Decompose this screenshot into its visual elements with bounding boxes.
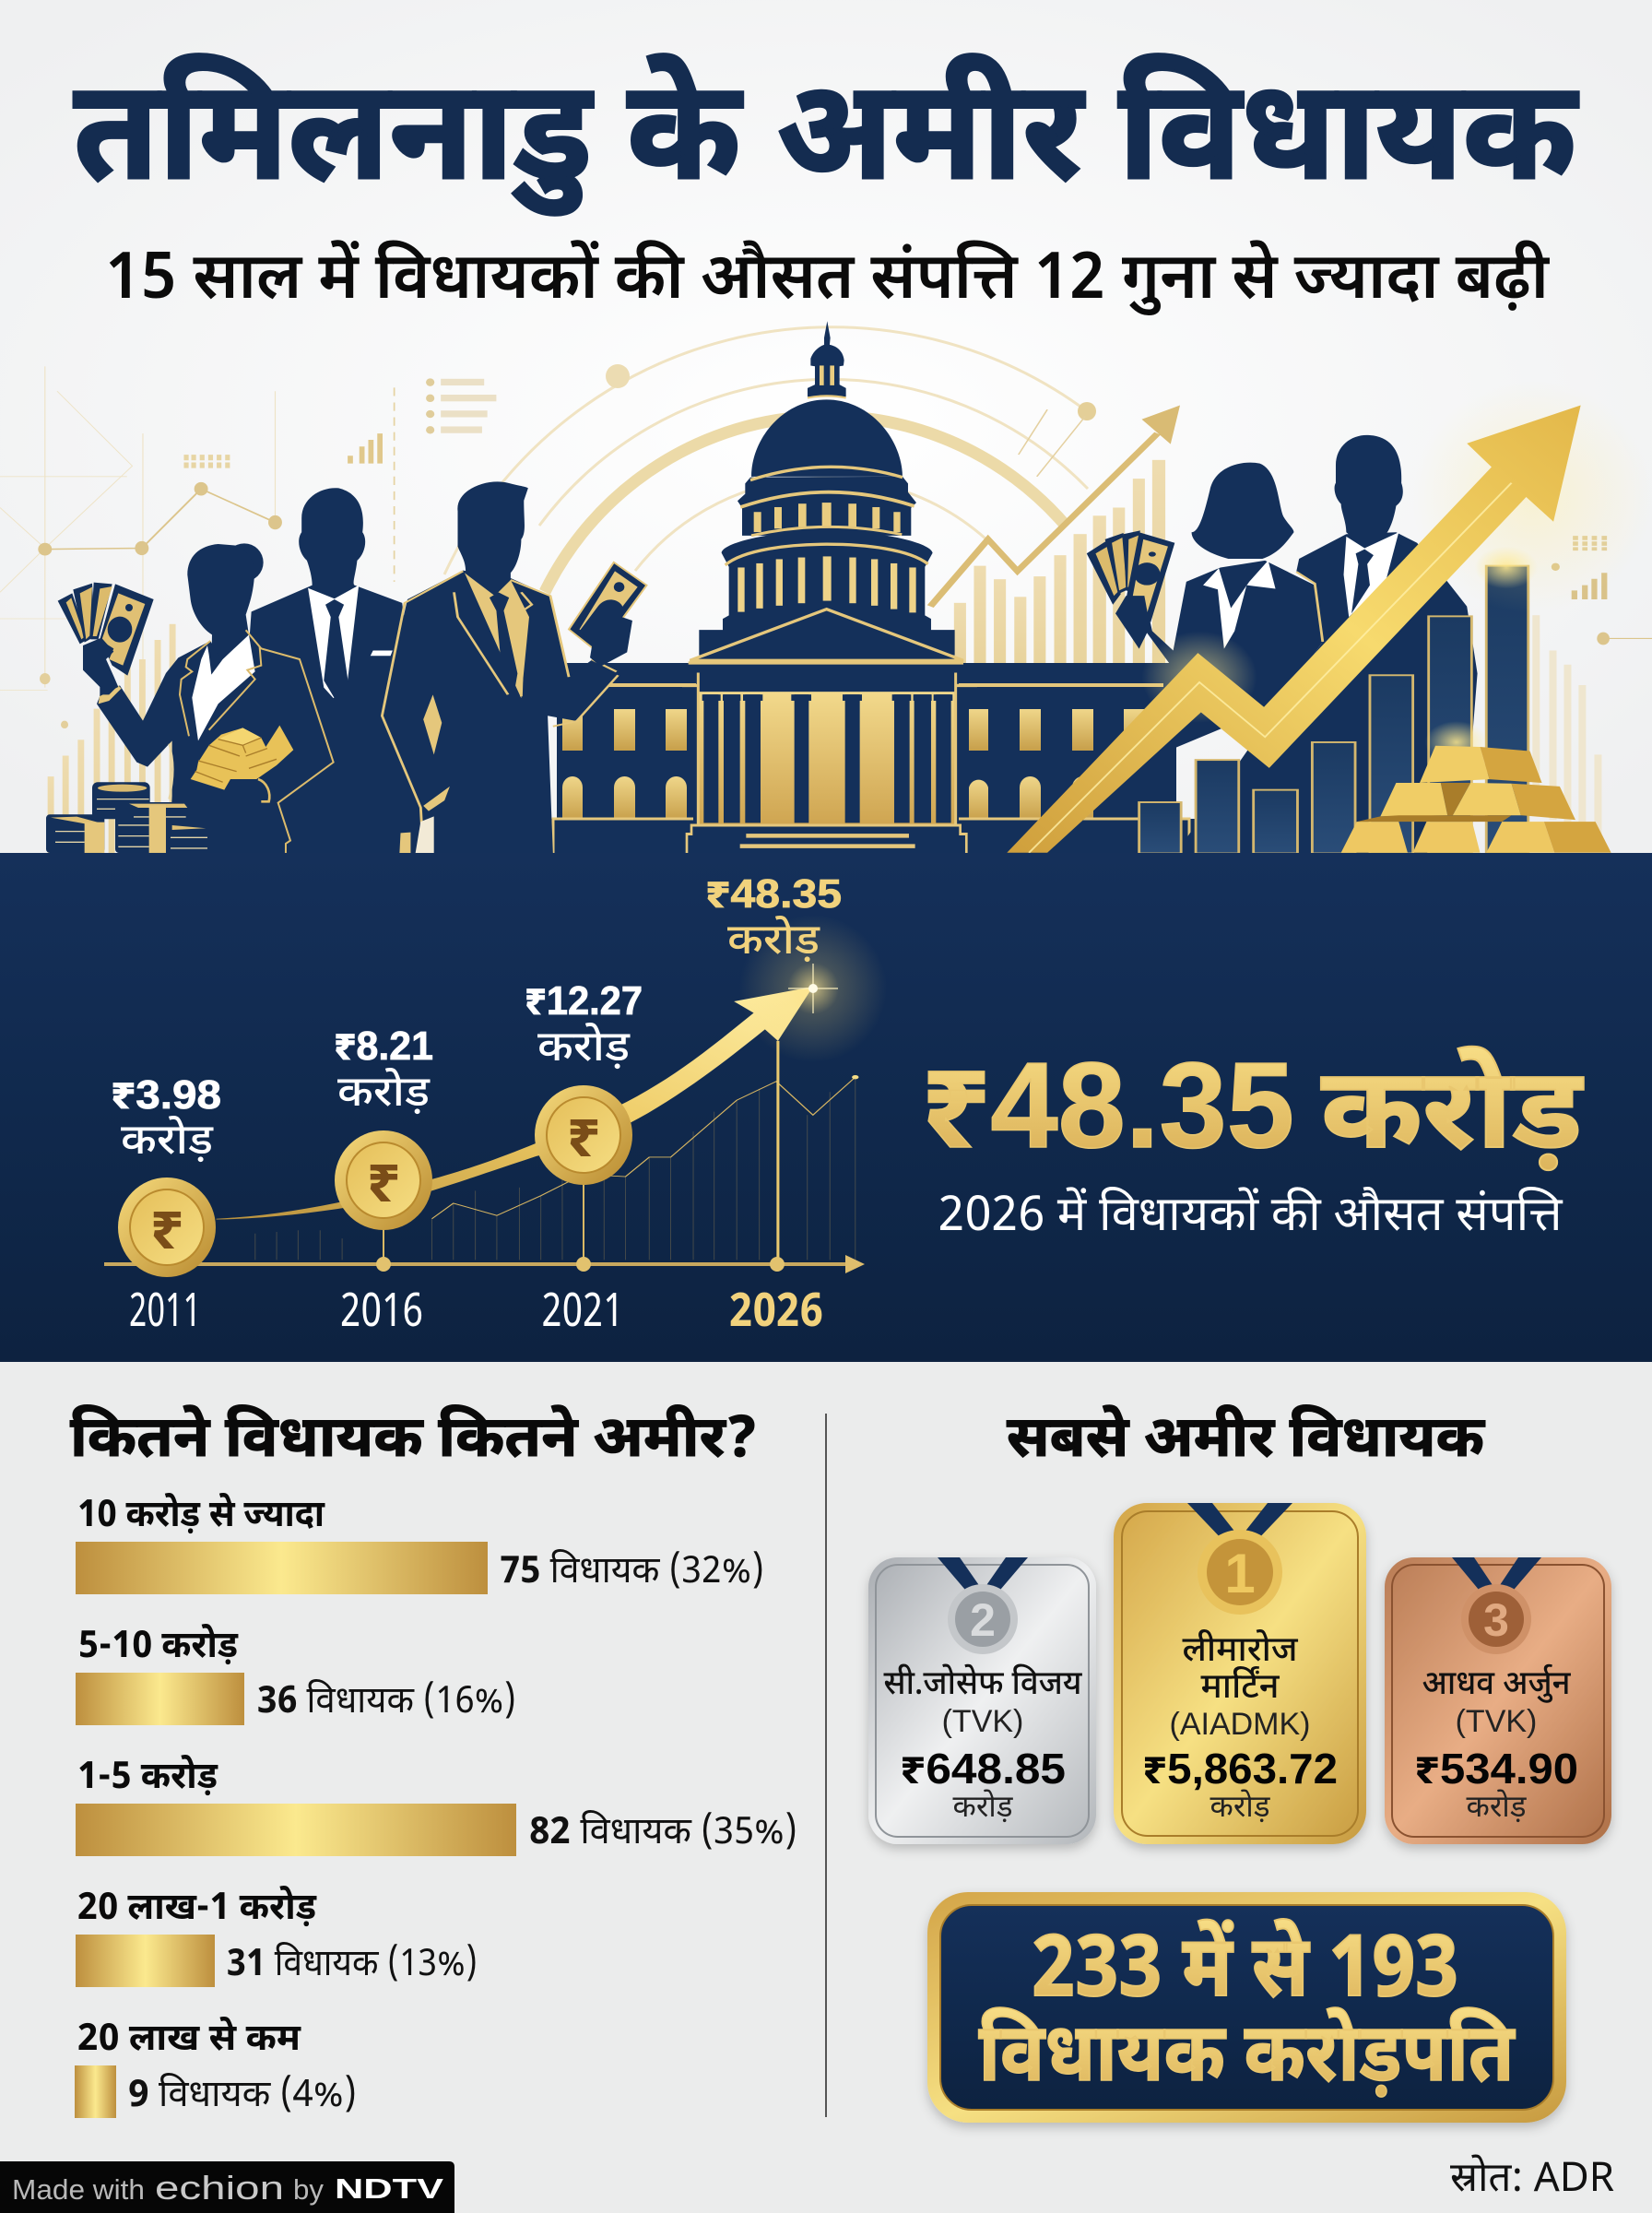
echion NDTV badge: echion <box>155 2169 284 2207</box>
value label 2016: करोड़ <box>337 1067 431 1123</box>
value label 2011: ₹3.98 <box>111 1072 221 1118</box>
value label 2011: करोड़ <box>121 1115 214 1171</box>
big gold rising arrow <box>1007 406 1581 853</box>
gold card: rank 1: (AIADMK) <box>1169 1707 1311 1742</box>
silver card: rank 2: ₹648.85 <box>900 1745 1066 1793</box>
capitol building <box>682 321 977 859</box>
navy rising bars <box>1139 566 1528 854</box>
echion NDTV badge: Made with <box>12 2173 145 2206</box>
right man silhouette with banknote <box>381 481 646 854</box>
year labels: 2011 <box>129 1285 201 1345</box>
year labels: 2026 <box>729 1285 823 1345</box>
coin 2011: ₹ <box>150 1197 183 1273</box>
right man silhouette <box>1175 435 1478 854</box>
row: 5 to 10 crore: 5-10 करोड़ <box>78 1624 239 1673</box>
left woman with money and gold <box>46 543 334 853</box>
row: below 20 lakh: 20 लाख से कम <box>77 2017 301 2065</box>
coin 2016: ₹ <box>367 1150 400 1226</box>
value label 2021 <box>525 978 643 1078</box>
small glowing trend line and grid <box>217 987 858 1263</box>
echion NDTV badge <box>0 2161 454 2213</box>
coin 2021 <box>535 1085 632 1185</box>
background arcs behind the capitol <box>444 327 1096 592</box>
right woman silhouette with money <box>1087 463 1323 748</box>
bronze card: rank 3: 3 <box>1483 1594 1509 1646</box>
row: 20 lakh to 1 crore: 20 लाख-1 करोड़ <box>77 1886 317 1935</box>
row: below 20 lakh: 9 विधायक (4%) <box>128 2073 357 2122</box>
value label 2021: करोड़ <box>537 1022 631 1078</box>
year labels: 2021 <box>542 1285 623 1345</box>
coin stacks <box>46 782 210 853</box>
big average wealth value: करोड़ <box>1321 1047 1585 1193</box>
hero illustration <box>0 321 1652 859</box>
silver card: rank 2: (TVK) <box>942 1704 1023 1739</box>
right background chart decoration <box>930 406 1652 835</box>
row: above 10 crore <box>76 1493 764 1598</box>
value label 2011 <box>111 1072 221 1171</box>
coin 2016 <box>335 1130 432 1230</box>
row: 1 to 5 crore: 1-5 करोड़ <box>77 1755 218 1804</box>
value label 2016: ₹8.21 <box>334 1024 433 1069</box>
source credit: स्रोत: ADR <box>1450 2154 1614 2207</box>
row: below 20 lakh <box>75 2017 357 2122</box>
panel: how rich bar chart <box>70 1403 797 2122</box>
row: 1 to 5 crore: 82 विधायक (35%) <box>529 1810 797 1859</box>
row: above 10 crore: 10 करोड़ से ज्यादा <box>77 1493 325 1542</box>
navy timeline band <box>0 853 1652 1362</box>
gold card: rank 1: मार्टिंन <box>1200 1665 1280 1712</box>
silver card: rank 2: सी.जोसेफ विजय <box>883 1663 1082 1708</box>
subtitle: 15 साल में विधायकों की औसत संपत्ति 12 गुना से ज्यादा बढ़ी <box>105 240 1550 325</box>
value label 2026 <box>705 871 842 971</box>
echion NDTV badge: NDTV <box>335 2172 443 2205</box>
gold card: rank 1: 1 <box>1224 1543 1256 1604</box>
left background chart decoration <box>0 366 496 854</box>
callout: 193 of 233 crorepati <box>927 1892 1566 2123</box>
gold card: rank 1 <box>1114 1503 1366 1844</box>
row: 20 lakh to 1 crore: 31 विधायक (13%) <box>227 1942 478 1991</box>
row: 5 to 10 crore <box>76 1624 516 1728</box>
silver card: rank 2: 2 <box>970 1594 996 1646</box>
average wealth caption: 2026 में विधायकों की औसत संपत्ति <box>938 1187 1564 1250</box>
row: 20 lakh to 1 crore <box>76 1886 478 1991</box>
coin 2021: ₹ <box>567 1105 600 1181</box>
callout: 193 of 233 crorepati: 233 में से 193 <box>1032 1919 1458 2030</box>
value label 2021: ₹12.27 <box>525 978 643 1024</box>
middle man silhouette <box>170 488 434 854</box>
bronze card: rank 3: (TVK) <box>1456 1704 1537 1739</box>
left money fan <box>58 583 154 696</box>
big average wealth value: ₹48.35 <box>921 1037 1294 1173</box>
rising curved arrow <box>217 987 813 1219</box>
people group: right woman, right man, bars, gold arrow and gold pile <box>1007 381 1652 854</box>
year labels <box>129 1285 823 1345</box>
year labels: 2016 <box>340 1285 423 1345</box>
timeline chart <box>104 871 887 1345</box>
value label 2026: करोड़ <box>727 915 820 971</box>
capitol wings <box>550 663 1196 856</box>
right panel heading: सबसे अमीर विधायक <box>1007 1403 1486 1480</box>
row: 5 to 10 crore: 36 विधायक (16%) <box>257 1679 516 1728</box>
gold card: rank 1: करोड़ <box>1210 1789 1270 1829</box>
row: 1 to 5 crore <box>76 1755 797 1859</box>
left panel heading: कितने विधायक कितने अमीर? <box>70 1403 758 1480</box>
gold bar pile <box>1341 746 1611 853</box>
panel: richest MLAs <box>868 1403 1611 2123</box>
header background <box>0 0 1652 853</box>
left woman silhouette <box>97 543 334 853</box>
value label 2026: ₹48.35 <box>705 871 842 917</box>
coin 2011 <box>118 1178 216 1277</box>
callout: 193 of 233 crorepati: विधायक करोड़पति <box>979 2007 1516 2113</box>
value label 2016 <box>334 1024 433 1123</box>
bronze card: rank 3: करोड़ <box>1466 1789 1527 1829</box>
gold card: rank 1: ₹5,863.72 <box>1142 1745 1338 1793</box>
row: above 10 crore: 75 विधायक (32%) <box>500 1549 764 1598</box>
bronze card: rank 3: ₹534.90 <box>1414 1745 1578 1793</box>
timeline axis <box>104 1262 853 1266</box>
gold card: rank 1: लीमारोज <box>1182 1628 1299 1675</box>
silver card: rank 2 <box>868 1557 1096 1844</box>
echion NDTV badge: by <box>293 2173 324 2206</box>
silver card: rank 2: करोड़ <box>952 1789 1013 1829</box>
title: तमिलनाडु के अमीर विधायक <box>74 53 1578 235</box>
gold bars in hand <box>191 726 293 801</box>
arrow glow <box>1411 381 1652 613</box>
bronze card: rank 3: आधव अर्जुन <box>1422 1663 1572 1708</box>
big average wealth value <box>921 1037 1585 1193</box>
bronze card: rank 3 <box>1385 1557 1611 1844</box>
